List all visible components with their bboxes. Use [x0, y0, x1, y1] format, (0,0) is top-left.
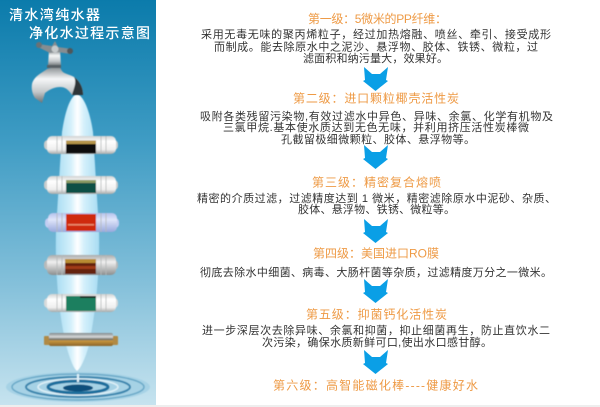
level 2 text: 三氯甲烷.基本使水质达到无色无味，并利用挤压活性炭棒微 — [223, 120, 529, 134]
icon: faucet — [32, 41, 83, 103]
filter 3: red label — [45, 213, 119, 232]
level 3 text — [197, 191, 556, 216]
level 2 heading: 第二级：进口颗粒椰壳活性炭 — [293, 90, 459, 106]
filter 1: black label — [44, 136, 118, 154]
arrow 3 — [363, 219, 388, 243]
water stream — [56, 94, 99, 371]
level 1 text: 滤面积和纳污量大，效果好。 — [303, 51, 448, 65]
title: 净化水过程示意图 — [29, 25, 150, 41]
level 5 heading: 第五级：抑菌钙化活性炭 — [306, 306, 447, 322]
water ripples — [6, 372, 150, 402]
level 4 text: 彻底去除水中细菌、病毒、大肠杆菌等杂质，过滤精度万分之一微米。 — [200, 265, 552, 279]
filter 4: brown label — [44, 255, 118, 275]
level 6 heading: 第六级：高智能磁化棒----健康好水 — [273, 378, 478, 392]
level 1 text: 采用无毒无味的聚丙烯粒子，经过加热熔融、喷丝、牵引、接受成形 — [201, 27, 551, 41]
level 3 text: 精密的介质过滤，过滤精度达到 1 微米，精密滤除原水中泥砂、杂质、 — [197, 191, 556, 205]
filter 6: magnetizing rod — [44, 333, 118, 346]
filter 2: green label — [44, 176, 118, 194]
title — [9, 7, 150, 41]
level 5 text — [202, 323, 550, 349]
title: 清水湾纯水器 — [9, 7, 100, 23]
level 3 heading: 第三级：精密复合熔喷 — [312, 174, 441, 190]
level 5 text: 进一步深层次去除异味、余氯和抑菌，抑止细菌再生，防止直饮水二 — [202, 323, 550, 337]
level 1 text — [201, 27, 551, 65]
filter 5: green label — [44, 294, 118, 312]
level 2 text: 吸附各类残留污染物,有效过滤水中异色、异味、余氯、化学有机物及 — [200, 109, 553, 123]
panel: blue illustration background — [0, 0, 156, 405]
level 1 heading: 第一级：5微米的PP纤维： — [308, 11, 447, 26]
arrow 4 — [363, 279, 388, 303]
level 2 text — [200, 109, 553, 146]
level 2 text: 孔截留极细微颗粒、胶体、悬浮物等。 — [281, 132, 475, 146]
level 1 text: 而制成。能去除原水中之泥沙、悬浮物、胶体、铁锈、微粒，过 — [214, 40, 538, 54]
level 3 text: 胶体、悬浮物、铁锈、微粒等。 — [298, 202, 455, 216]
level 5 text: 次污染，确保水质新鲜可口,使出水口感甘醇。 — [262, 335, 492, 349]
arrow 2 — [363, 145, 388, 169]
arrow 1 — [363, 67, 388, 91]
level 4 heading: 第四级：美国进口RO膜 — [313, 246, 439, 260]
arrow 5 — [363, 350, 388, 374]
